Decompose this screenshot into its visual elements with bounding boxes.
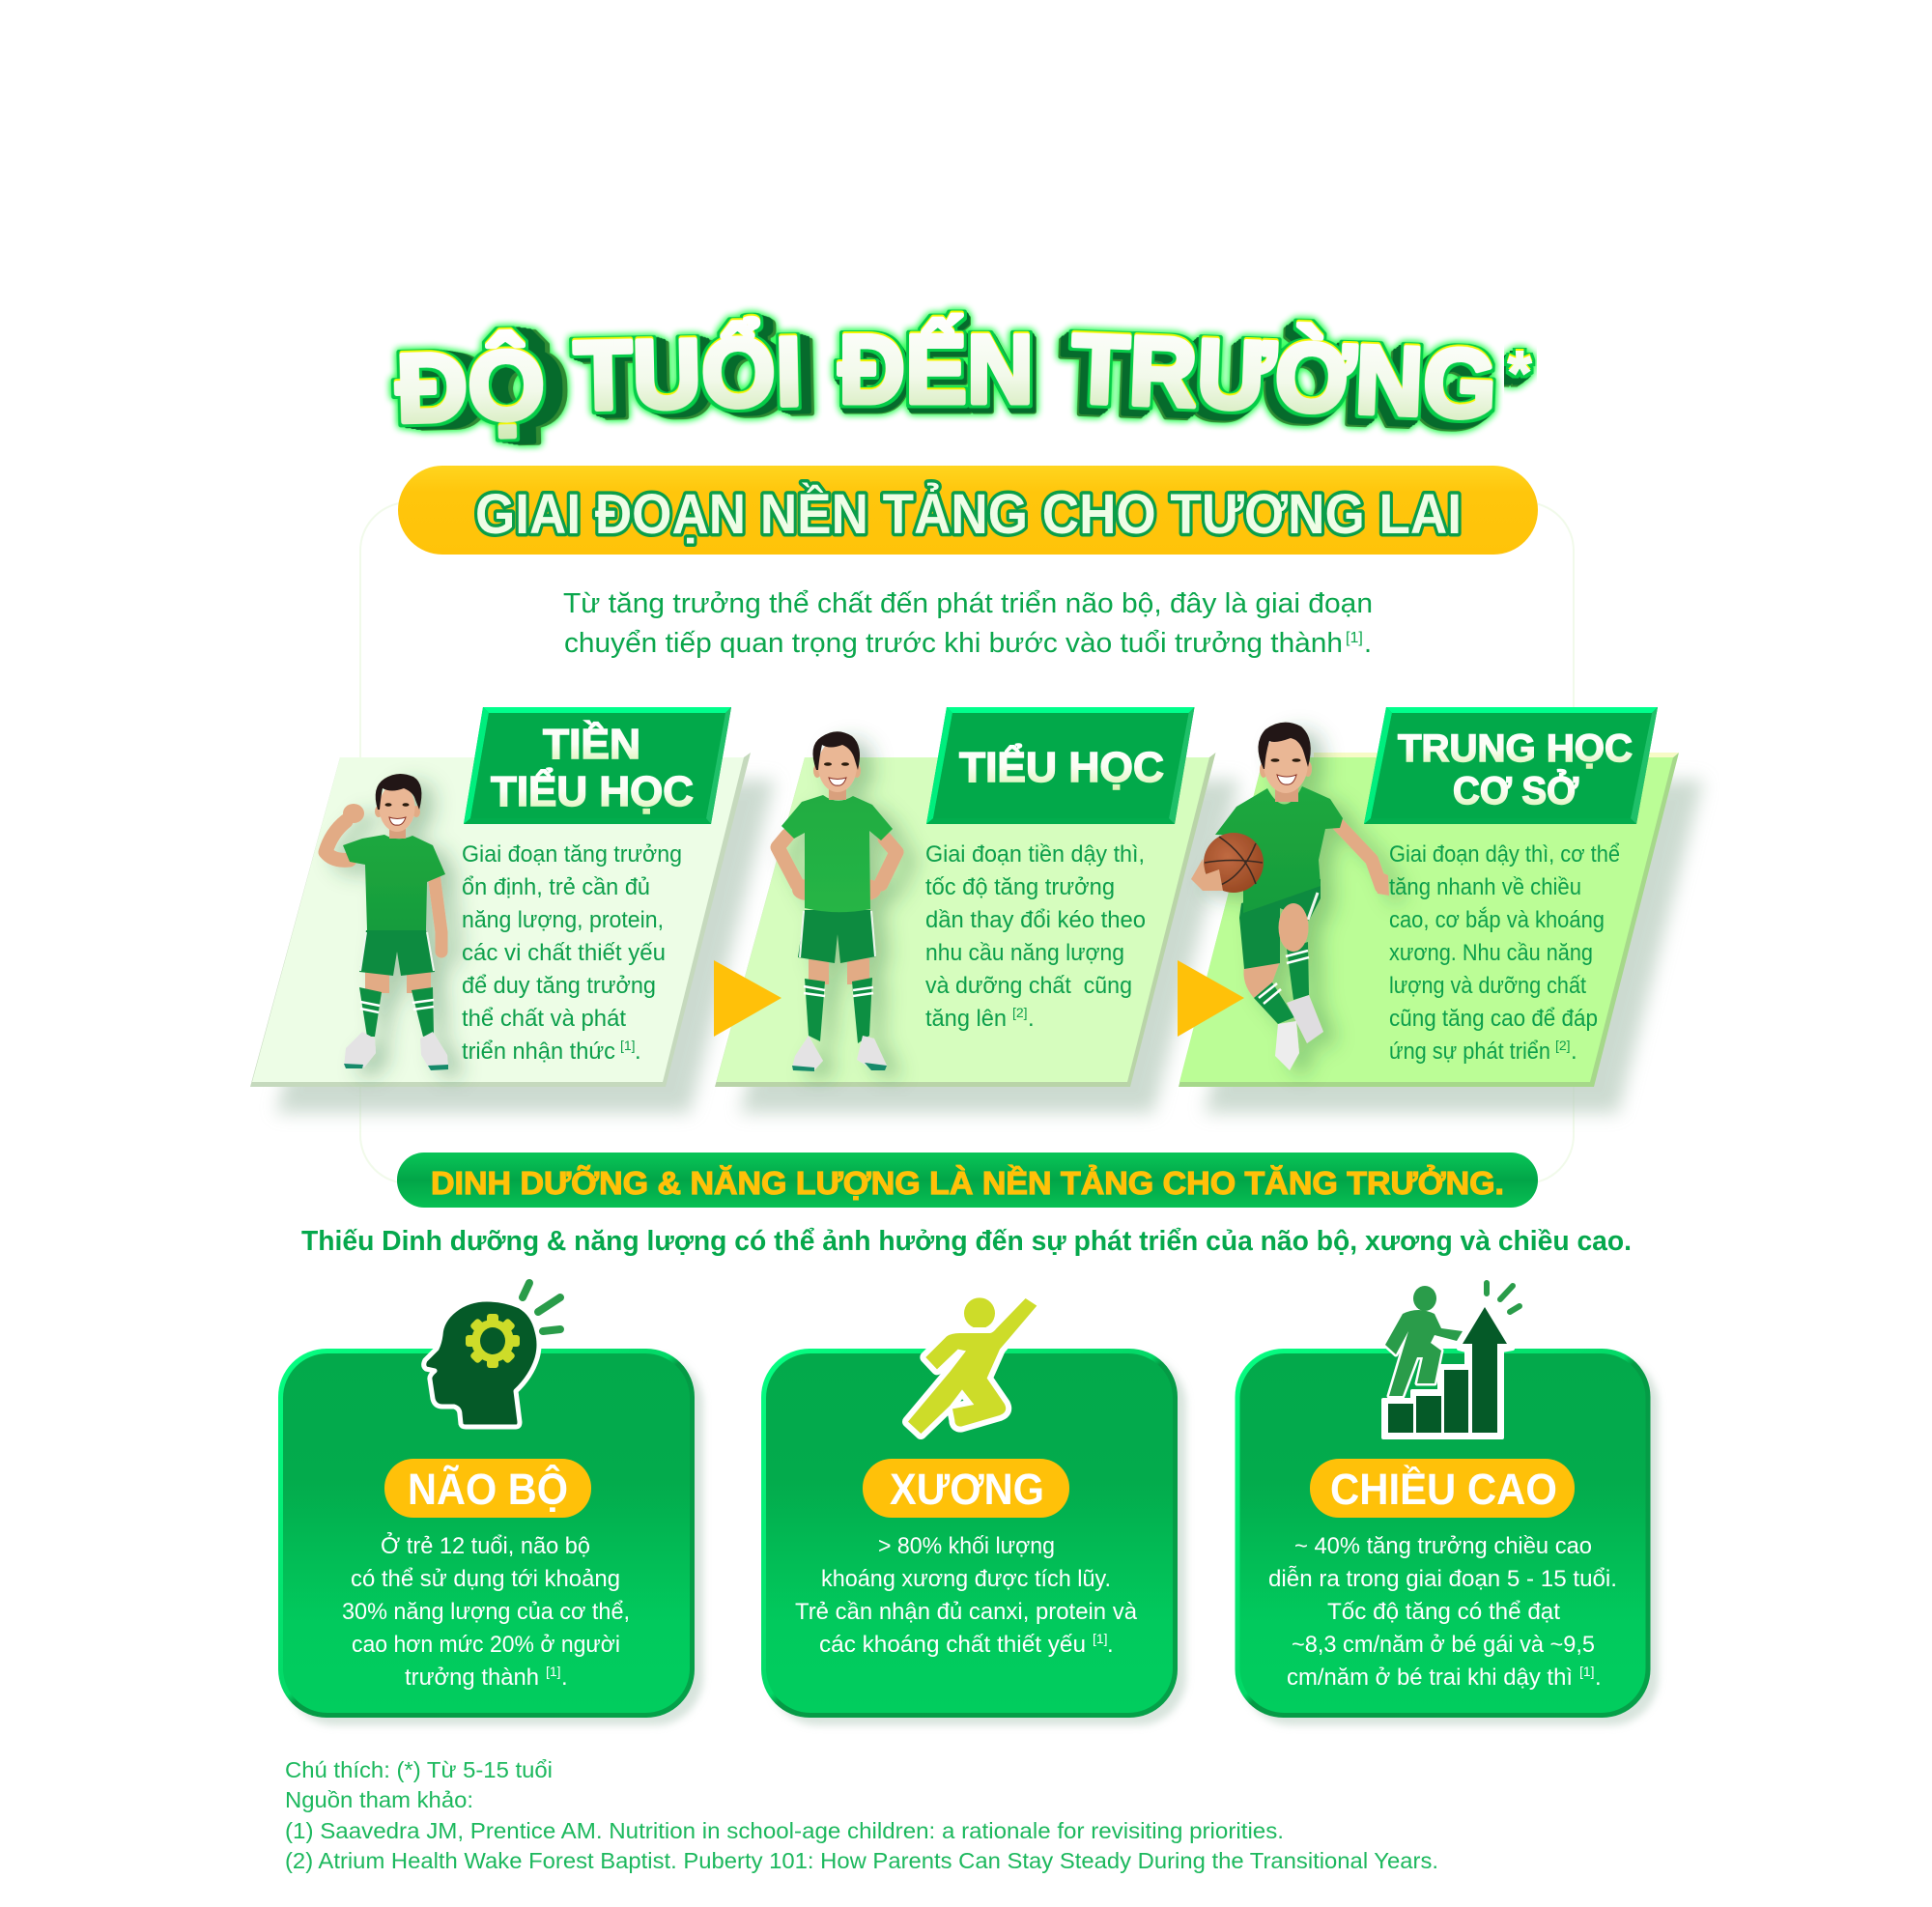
tab: trung học cơ sở: CƠ SỞ [1453,768,1579,812]
tab: tiền tiểu học: TIỀN [543,720,640,768]
card: xương [761,1349,1186,1725]
pill heading: CHIỀU CAO [1330,1465,1557,1514]
card text: [1] [546,1664,561,1679]
pill heading: XƯƠNG [890,1465,1044,1514]
intro text [563,588,1373,659]
subheading: Thiếu Dinh dưỡng & năng lượng có thể ảnh hưởng đến sự phát triển của não bộ, xương và chiều cao. [301,1226,1632,1257]
card text: các khoáng chất thiết yếu [819,1632,1086,1658]
panel 1 text: các vi chất thiết yếu [462,940,666,966]
panel: tiền tiểu học [250,753,775,1113]
title [395,315,1532,443]
card text: Trẻ cần nhận đủ canxi, protein và [795,1599,1138,1625]
card text: . [1107,1632,1114,1658]
card text: Ở trẻ 12 tuổi, não bộ [381,1531,590,1559]
title: ĐẾN [838,316,1034,424]
pill heading: NÃO BỘ [408,1465,568,1514]
footnote [285,1757,1438,1873]
banner: dinh dưỡng [397,1153,1538,1208]
background: faint rounded outline [360,502,1574,1183]
intro text: Từ tăng trưởng thể chất đến phát triển não bộ, đây là giai đoạn [563,588,1373,619]
panel 3 text: Giai đoạn dậy thì, cơ thể [1389,841,1620,868]
banner: giai đoạn nền tảng [398,466,1538,555]
arrow 2 [1178,960,1244,1037]
panel 3 text: cao, cơ bắp và khoáng [1389,907,1605,933]
panel: trung học cơ sở [1179,723,1703,1113]
panel 1 text: năng lượng, protein, [462,907,664,933]
card text: > 80% khối lượng [878,1533,1055,1559]
panel 3 text: ứng sự phát triển [1389,1039,1550,1065]
icon: running figure [908,1297,1037,1434]
panel 2 text: dần thay đổi kéo theo [925,907,1146,933]
panel 1 boy [326,774,448,1070]
footnote: (1) Saavedra JM, Prentice AM. Nutrition in school-age children: a rationale for revisiting priorities. [285,1818,1284,1843]
panel 1 text: Giai đoạn tăng trưởng [462,841,682,868]
footnote: (2) Atrium Health Wake Forest Baptist. Puberty 101: How Parents Can Stay Steady During the Transitional Years. [285,1848,1438,1873]
panel 1 text: thể chất và phát [462,1006,626,1032]
intro text: chuyển tiếp quan trọng trước khi bước vào tuổi trưởng thành [564,628,1343,659]
tab: tiền tiểu học: TIỂU HỌC [491,766,694,815]
card text: khoáng xương được tích lũy. [821,1566,1111,1592]
card text: có thể sử dụng tới khoảng [351,1566,620,1592]
panel 2 text: và dưỡng chất cũng [925,973,1132,999]
card text: [1] [1093,1631,1108,1646]
panel 3 text: lượng và dưỡng chất [1389,973,1586,999]
card text: Tốc độ tăng có thể đạt [1327,1599,1560,1625]
intro text: [1] [1346,630,1363,646]
panel 1 text: để duy tăng trưởng [462,973,656,999]
panel 1 text: [1] [620,1038,636,1053]
card text: trưởng thành [405,1665,539,1691]
tab: trung học cơ sở [1364,707,1658,824]
panel 3 text: [2] [1555,1038,1571,1053]
panel 2 text: Giai đoạn tiền dậy thì, [925,841,1145,868]
card text [795,1533,1138,1658]
banner: giai đoạn nền tảng: GIAI ĐOẠN NỀN TẢNG CHO TƯƠNG LAI [475,483,1462,546]
panel 2 text: [2] [1012,1005,1028,1020]
panel 3 text [1389,841,1620,1065]
panel 3 text: cũng tăng cao để đáp [1389,1006,1598,1032]
icon: head with gear [424,1283,560,1427]
panel 3 text: tăng nhanh về chiều [1389,874,1581,900]
card text [342,1531,630,1691]
pill heading [863,1459,1069,1518]
panel 2 text: nhu cầu năng lượng [925,940,1124,966]
card text: [1] [1579,1664,1595,1679]
card text: cao hơn mức 20% ở người [352,1632,620,1658]
title: ĐỘ [395,331,547,443]
card: não bộ [278,1349,703,1725]
arrow 1 [714,960,781,1037]
card: chiều cao [1235,1349,1659,1725]
card text: ~ 40% tăng trưởng chiều cao [1294,1533,1592,1559]
card text: cm/năm ở bé trai khi dậy thì [1287,1665,1573,1691]
panel 2 text: tăng lên [925,1006,1007,1032]
panel 3 text: xương. Nhu cầu năng [1389,940,1593,966]
intro text: . [1364,628,1372,659]
panel: tiểu học [715,731,1239,1113]
title: TUỔI [573,318,803,431]
card text: ~8,3 cm/năm ở bé gái và ~9,5 [1292,1632,1595,1658]
panel 1 text: ổn định, trẻ cần đủ [462,874,650,900]
panel 1 text: . [635,1039,641,1065]
panel 1 text: triển nhận thức [462,1039,615,1065]
panel 1 text [462,841,682,1065]
card text: diễn ra trong giai đoạn 5 - 15 tuổi. [1268,1566,1617,1592]
panel 2 boy [778,731,896,1071]
panel 3 boy [1191,723,1389,1070]
banner: dinh dưỡng: DINH DƯỠNG & NĂNG LƯỢNG LÀ NỀN TẢNG CHO TĂNG TRƯỞNG. [431,1165,1504,1201]
tab: tiểu học [926,707,1194,824]
title: TRƯỜNG [1069,315,1498,440]
title: * [1508,340,1532,407]
footnote: Nguồn tham khảo: [285,1787,473,1812]
panel 3 text: . [1571,1039,1577,1065]
card text: . [1595,1665,1602,1691]
footnote: Chú thích: (*) Từ 5-15 tuổi [285,1757,553,1782]
tab: tiểu học: TIỂU HỌC [959,742,1164,791]
tab: tiền tiểu học [464,707,731,824]
card text: 30% năng lượng của cơ thể, [342,1599,630,1625]
card text: . [561,1665,568,1691]
card text [1268,1533,1617,1691]
icon: climbing growth chart [1383,1283,1520,1437]
panel 2 text: . [1028,1006,1035,1032]
panel 2 text: tốc độ tăng trưởng [925,874,1115,900]
tab: trung học cơ sở: TRUNG HỌC [1398,727,1633,770]
panel 2 text [925,841,1146,1032]
